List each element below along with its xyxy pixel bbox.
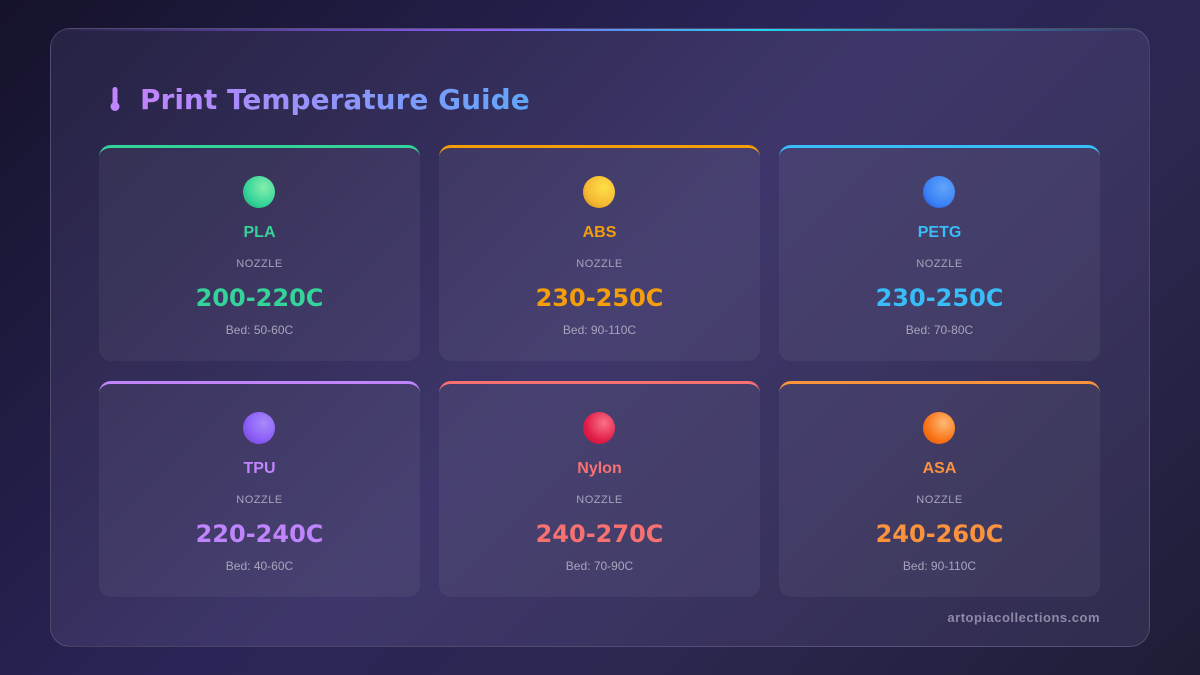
card: ABS: Bed: 90-110C xyxy=(563,323,636,337)
footer: artopiacollections.com xyxy=(947,610,1100,625)
title: Print Temperature Guide xyxy=(140,82,530,116)
card: PETG: Bed: 70-80C xyxy=(906,323,973,337)
card: PETG: 230-250C xyxy=(876,284,1003,312)
card: PLA: PLA xyxy=(244,224,276,241)
card: ASA: 240-260C xyxy=(876,520,1003,548)
card: PLA: Bed: 50-60C xyxy=(226,323,293,337)
card: Nylon: Nylon xyxy=(577,460,622,477)
card: PETG: PETG xyxy=(918,224,961,241)
card: ASA: Bed: 90-110C xyxy=(903,559,976,573)
card: PLA xyxy=(99,145,420,361)
card: TPU: TPU xyxy=(244,460,276,477)
card: PETG xyxy=(779,145,1100,361)
card: TPU xyxy=(99,381,420,597)
card: TPU: 220-240C xyxy=(196,520,323,548)
card: Nylon: Bed: 70-90C xyxy=(566,559,633,573)
card: PETG: NOZZLE xyxy=(916,258,963,270)
card: ABS: NOZZLE xyxy=(576,258,623,270)
card: TPU: NOZZLE xyxy=(236,494,283,506)
card: Nylon: 240-270C xyxy=(536,520,663,548)
card: ASA: ASA xyxy=(923,460,956,477)
card: ABS xyxy=(439,145,760,361)
card: ASA: NOZZLE xyxy=(916,494,963,506)
card: Nylon: NOZZLE xyxy=(576,494,623,506)
card: Nylon xyxy=(439,381,760,597)
card: ABS: ABS xyxy=(583,224,616,241)
card: TPU: Bed: 40-60C xyxy=(226,559,293,573)
card: PLA: NOZZLE xyxy=(236,258,283,270)
card: ABS: 230-250C xyxy=(536,284,663,312)
card: ASA xyxy=(779,381,1100,597)
card: PLA: 200-220C xyxy=(196,284,323,312)
